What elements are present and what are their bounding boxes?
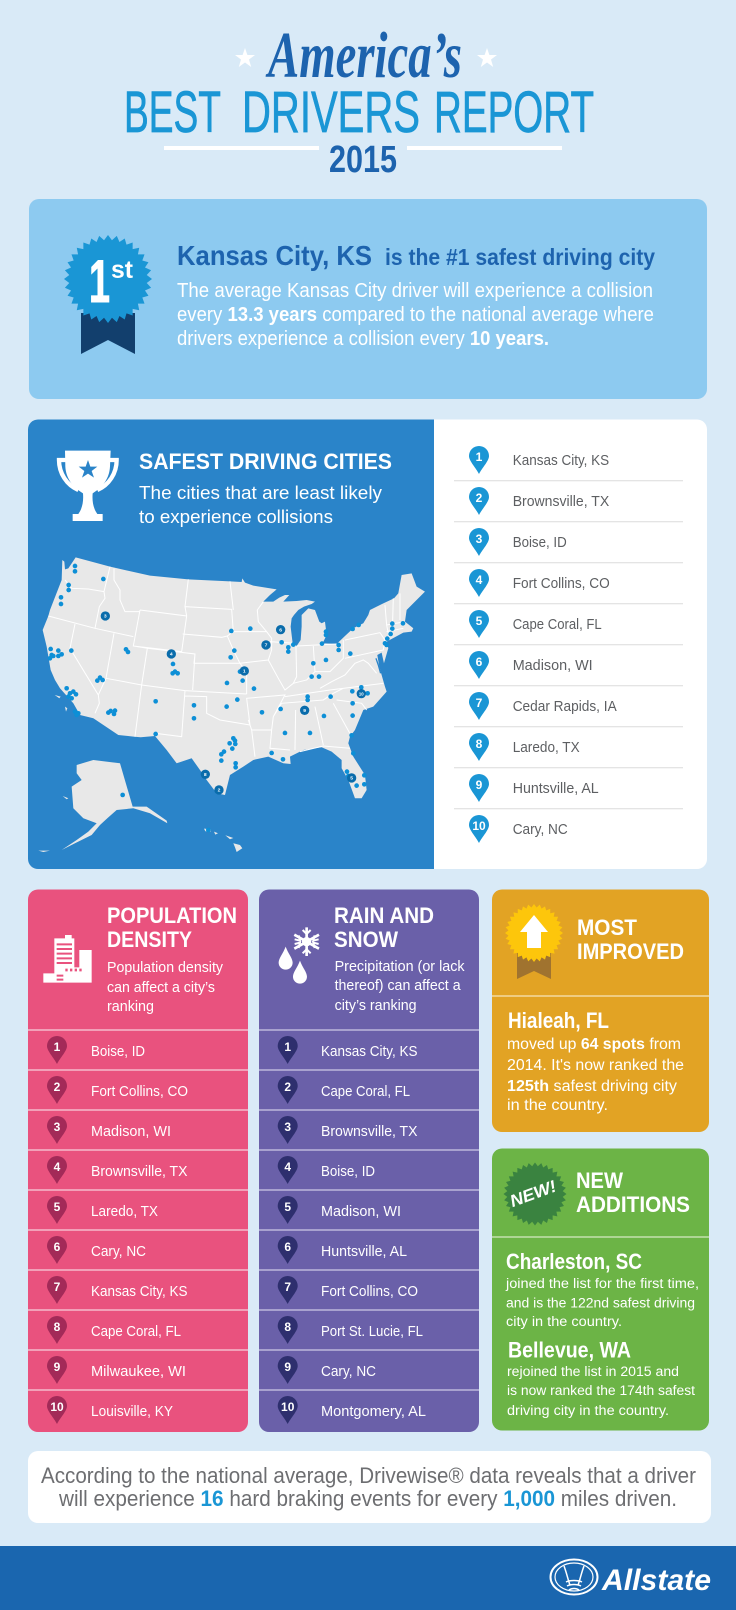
ranking list: rain and snow: Huntsville, AL <box>321 1243 407 1260</box>
ranking list: rain and snow: 6 <box>284 1240 291 1254</box>
ranking list: rain and snow: Brownsville, TX <box>321 1123 418 1140</box>
panel heading: RAIN AND <box>334 903 434 928</box>
map: numbered top ten markers: 1 <box>243 669 246 675</box>
ranking list: rain and snow: 3 <box>284 1120 291 1134</box>
panel heading <box>577 915 684 964</box>
icon: first place ribbon: st <box>111 256 134 284</box>
panel: new additions <box>492 1148 709 1430</box>
ranking list: rain and snow: 1 <box>284 1040 291 1054</box>
text block: Bellevue details: rejoined the list in 2015 and <box>507 1364 679 1379</box>
ranking list: population density: 4 <box>54 1160 61 1174</box>
section heading: SAFEST DRIVING CITIES <box>139 449 392 474</box>
ranking list: rain and snow: Boise, ID <box>321 1163 375 1180</box>
section description <box>139 482 383 527</box>
ranking list: population density: Laredo, TX <box>91 1203 158 1220</box>
banner heading: is the #1 safest driving city <box>385 244 655 270</box>
banner body text: drivers experience a collision every 10 years. <box>177 328 549 350</box>
list: top ten safest cities: 9 <box>476 778 483 792</box>
list: top ten safest cities: 3 <box>476 532 483 546</box>
ranking list: rain and snow: 9 <box>284 1360 291 1374</box>
ranking list: population density: 6 <box>54 1240 61 1254</box>
panel description <box>107 960 224 1015</box>
list: top ten safest cities: 5 <box>476 614 483 628</box>
map: numbered top ten markers: 2 <box>218 788 221 794</box>
panel heading: DENSITY <box>107 927 192 952</box>
list: top ten safest cities: Huntsville, AL <box>513 780 599 797</box>
text block: Charleston details: joined the list for the first time, <box>505 1276 699 1291</box>
logo wordmark: Allstate <box>601 1564 711 1597</box>
title main line <box>124 80 594 145</box>
text block: Bellevue details: is now ranked the 174th safest <box>507 1383 695 1398</box>
ranking list: rain and snow: 5 <box>284 1200 291 1214</box>
banner heading <box>177 240 655 271</box>
title <box>124 19 594 181</box>
map: numbered top ten markers: 3 <box>104 614 107 620</box>
text block: Hialeah details: 2014. It's now ranked the <box>507 1057 684 1074</box>
list: top ten safest cities: Kansas City, KS <box>513 452 609 469</box>
ranking list: rain and snow: Cape Coral, FL <box>321 1083 410 1100</box>
star left <box>235 48 255 67</box>
text block: Hialeah details: moved up 64 spots from <box>507 1036 681 1053</box>
banner heading: Kansas City, KS <box>177 240 372 271</box>
panel heading: IMPROVED <box>577 939 684 964</box>
ranking list: population density: 5 <box>54 1200 61 1214</box>
ranking list: rain and snow: 10 <box>281 1400 295 1414</box>
callout: Drivewise statistic <box>28 1451 711 1523</box>
map: Hawaii <box>204 829 242 852</box>
title rule right <box>407 146 562 150</box>
ranking list: rain and snow: 8 <box>284 1320 291 1334</box>
list: top ten safest cities: 7 <box>476 696 483 710</box>
ranking list: population density: 7 <box>54 1280 61 1294</box>
ranking list: rain and snow: 7 <box>284 1280 291 1294</box>
ranking list: population density: 3 <box>54 1120 61 1134</box>
icon: new badge: NEW! <box>507 1177 559 1211</box>
icon: Allstate logo <box>550 1560 598 1594</box>
map: numbered top ten markers: 9 <box>303 708 306 714</box>
panel heading: POPULATION <box>107 903 237 928</box>
map: numbered top ten markers: 10 <box>359 691 364 696</box>
panel heading <box>576 1168 690 1217</box>
map: contiguous states <box>43 557 425 798</box>
panel: safest driving cities <box>28 420 707 869</box>
list: top ten safest cities: Madison, WI <box>513 657 593 674</box>
ranking list: rain and snow <box>259 1030 479 1424</box>
text block: Charleston details <box>505 1276 699 1329</box>
panel: rain and snow <box>259 890 479 1432</box>
year: 2015 <box>329 139 397 181</box>
panel: most improved <box>492 890 709 1132</box>
text block: Bellevue details <box>507 1364 695 1418</box>
panel heading: NEW <box>576 1168 624 1193</box>
ranking list: population density: 2 <box>54 1080 61 1094</box>
ranking list: population density: Louisville, KY <box>91 1403 173 1420</box>
list: top ten safest cities: Boise, ID <box>513 534 567 551</box>
list: top ten safest cities: 6 <box>476 655 483 669</box>
map: Alaska <box>38 760 167 852</box>
list: top ten safest cities: 2 <box>476 491 483 505</box>
ranking list: population density: Milwaukee, WI <box>91 1363 186 1380</box>
title main line: REPORT <box>434 80 594 145</box>
panel heading: MOST <box>577 915 637 940</box>
map: numbered top ten markers: 6 <box>279 627 282 633</box>
map: Chesapeake bay <box>376 658 381 673</box>
list: top ten safest cities: 4 <box>476 573 483 587</box>
banner body text: The average Kansas City driver will experience a collision <box>177 280 653 302</box>
list: top ten safest cities: Cary, NC <box>513 821 568 838</box>
list: top ten safest cities: Brownsville, TX <box>513 493 609 510</box>
panel heading <box>107 903 237 952</box>
list: top ten safest cities: Fort Collins, CO <box>513 575 610 592</box>
title main line: BEST <box>124 80 221 145</box>
panel description <box>335 959 465 1014</box>
map: California islands <box>55 695 67 712</box>
panel heading: SNOW <box>334 927 399 952</box>
callout: Drivewise statistic: According to the national average, Drivewise® data reveals that a driver <box>41 1463 696 1488</box>
text block: Charleston details: city in the country. <box>506 1314 622 1329</box>
panel heading: ADDITIONS <box>576 1192 690 1217</box>
banner body text: every 13.3 years compared to the national average where <box>177 304 654 326</box>
icon: first place ribbon <box>64 235 152 354</box>
ranking list: rain and snow: 2 <box>284 1080 291 1094</box>
list: top ten safest cities: 8 <box>476 737 483 751</box>
star right <box>477 48 497 67</box>
map: numbered top ten markers: 4 <box>170 652 173 658</box>
icon: snowflake and raindrops <box>279 927 319 984</box>
panel description: Precipitation (or lack <box>335 959 465 975</box>
panel: number one city <box>29 199 707 399</box>
icon: improvement ribbon with arrow <box>505 904 563 979</box>
city name: Charleston: Charleston, SC <box>506 1249 642 1274</box>
ranking list: rain and snow: Montgomery, AL <box>321 1403 426 1420</box>
list: top ten safest cities <box>454 446 683 843</box>
chart: map of US cities <box>38 557 425 852</box>
list: top ten safest cities: 1 <box>476 450 483 464</box>
ranking list: rain and snow: 4 <box>284 1160 291 1174</box>
text block: Bellevue details: driving city in the country. <box>507 1403 669 1418</box>
callout: Drivewise statistic: will experience 16 hard braking events for every 1,000 miles driven. <box>58 1486 677 1511</box>
map: numbered top ten markers <box>101 611 366 795</box>
ranking list: population density <box>28 1030 248 1424</box>
panel heading <box>334 903 434 952</box>
map: numbered top ten markers: 7 <box>265 643 268 649</box>
section description: The cities that are least likely <box>139 482 383 503</box>
ranking list: population density: 8 <box>54 1320 61 1334</box>
panel description: can affect a city’s <box>107 980 215 996</box>
ranking list: population density: Fort Collins, CO <box>91 1083 188 1100</box>
text block: Hialeah details: 125th safest driving city <box>507 1078 677 1095</box>
text block: Charleston details: and is the 122nd safest driving <box>506 1296 695 1310</box>
panel description: thereof) can affect a <box>335 978 462 994</box>
text block: Hialeah details: in the country. <box>507 1097 608 1114</box>
panel: population density <box>28 890 248 1432</box>
list: top ten safest cities: Cedar Rapids, IA <box>513 698 617 715</box>
ranking list: rain and snow: Madison, WI <box>321 1203 401 1220</box>
list: top ten safest cities: Cape Coral, FL <box>513 616 602 633</box>
ranking list: population density: Boise, ID <box>91 1043 145 1060</box>
ranking list: population density: Madison, WI <box>91 1123 171 1140</box>
ranking list: population density: 1 <box>54 1040 61 1054</box>
map: numbered top ten markers: 8 <box>204 772 207 778</box>
list: top ten safest cities: Laredo, TX <box>513 739 580 756</box>
icon: new badge <box>504 1162 566 1226</box>
map: state borders <box>48 567 405 757</box>
text block: Hialeah details <box>507 1036 684 1114</box>
panel description: ranking <box>107 999 154 1015</box>
city name: Hialeah: Hialeah, FL <box>508 1008 609 1033</box>
panel description: city’s ranking <box>335 998 417 1014</box>
ranking list: population density: 10 <box>50 1400 64 1414</box>
ranking list: rain and snow: Kansas City, KS <box>321 1043 418 1060</box>
list: top ten safest cities: 10 <box>472 819 486 833</box>
ranking list: rain and snow: Cary, NC <box>321 1363 376 1380</box>
ranking list: population density: Cape Coral, FL <box>91 1323 181 1340</box>
title main line: DRIVERS <box>242 80 420 145</box>
ranking list: population density: Cary, NC <box>91 1243 146 1260</box>
title rule left <box>164 146 319 150</box>
ranking list: population density: Kansas City, KS <box>91 1283 188 1300</box>
map: numbered top ten markers: 5 <box>350 776 353 782</box>
icon: first place ribbon: 1 <box>89 248 110 315</box>
footer <box>0 1546 736 1610</box>
ranking list: rain and snow: Port St. Lucie, FL <box>321 1323 423 1340</box>
icon: trophy <box>59 451 117 521</box>
title script: America's: America’s <box>265 19 462 92</box>
panel description: Population density <box>107 960 224 976</box>
ranking list: rain and snow: Fort Collins, CO <box>321 1283 418 1300</box>
city name: Bellevue: Bellevue, WA <box>508 1338 631 1362</box>
ranking list: population density: 9 <box>54 1360 61 1374</box>
icon: buildings <box>43 935 92 983</box>
banner body text <box>177 280 654 350</box>
ranking list: population density: Brownsville, TX <box>91 1163 188 1180</box>
map: city dots <box>48 564 405 832</box>
section description: to experience collisions <box>139 506 333 527</box>
